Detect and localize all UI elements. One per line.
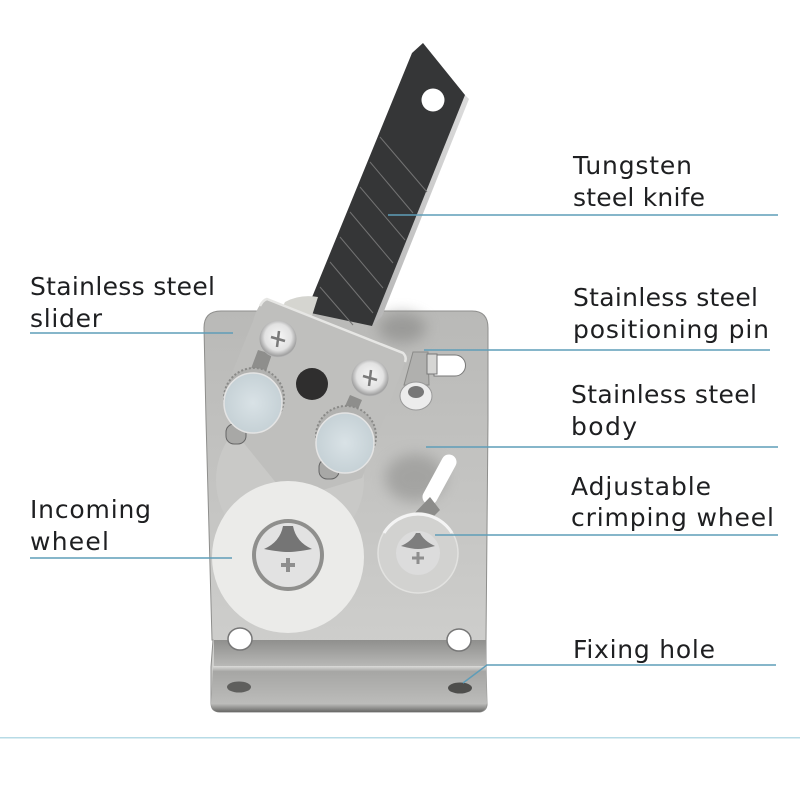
- label: stainless steel body: body: [571, 412, 637, 441]
- knob right: [316, 406, 376, 466]
- label: stainless steel positioning pin: [573, 283, 769, 344]
- upper slot: [434, 355, 466, 376]
- label: stainless steel positioning pin: Stainless steel: [573, 283, 758, 312]
- incoming wheel: [212, 481, 364, 633]
- roller behind blade: [280, 296, 318, 322]
- label: tungsten steel knife: Tungsten: [572, 151, 692, 180]
- label: adjustable crimping wheel: Adjustable: [571, 472, 711, 501]
- tool body: stainless steel plate with flange: [204, 311, 488, 712]
- label: adjustable crimping wheel: crimping wheel: [571, 503, 774, 532]
- label: tungsten steel knife: [572, 151, 705, 212]
- label: incoming wheel: wheel: [30, 527, 109, 556]
- fixing holes in plate: [228, 628, 252, 650]
- leader lines: [30, 215, 778, 683]
- label: incoming wheel: [30, 495, 151, 556]
- label: fixing hole: Fixing hole: [573, 635, 715, 664]
- knob left: [224, 368, 284, 428]
- adjustable crimping wheel: [378, 497, 458, 593]
- label: tungsten steel knife: steel knife: [573, 183, 705, 212]
- upper slots: [243, 350, 272, 395]
- positioning pin: [400, 352, 437, 410]
- label: adjustable crimping wheel: [571, 472, 774, 532]
- screws: [260, 320, 296, 358]
- label: stainless steel body: Stainless steel: [571, 380, 757, 409]
- label: stainless steel positioning pin: positioning pin: [573, 315, 769, 344]
- label: incoming wheel: Incoming: [30, 495, 151, 524]
- lower studs: [226, 424, 246, 444]
- label: stainless steel slider: [30, 272, 215, 333]
- baseline rule: [0, 737, 800, 738]
- black hole: [296, 368, 328, 400]
- lower angled slot: [430, 462, 449, 497]
- blade: tungsten steel knife: [306, 43, 469, 326]
- label: stainless steel slider: slider: [30, 304, 103, 333]
- label: stainless steel slider: Stainless steel: [30, 272, 215, 301]
- flange: [211, 666, 487, 712]
- slider plate: [216, 299, 406, 554]
- bend strip: [214, 640, 486, 666]
- label: stainless steel body: [571, 380, 757, 441]
- fixing holes in flange: [227, 682, 251, 692]
